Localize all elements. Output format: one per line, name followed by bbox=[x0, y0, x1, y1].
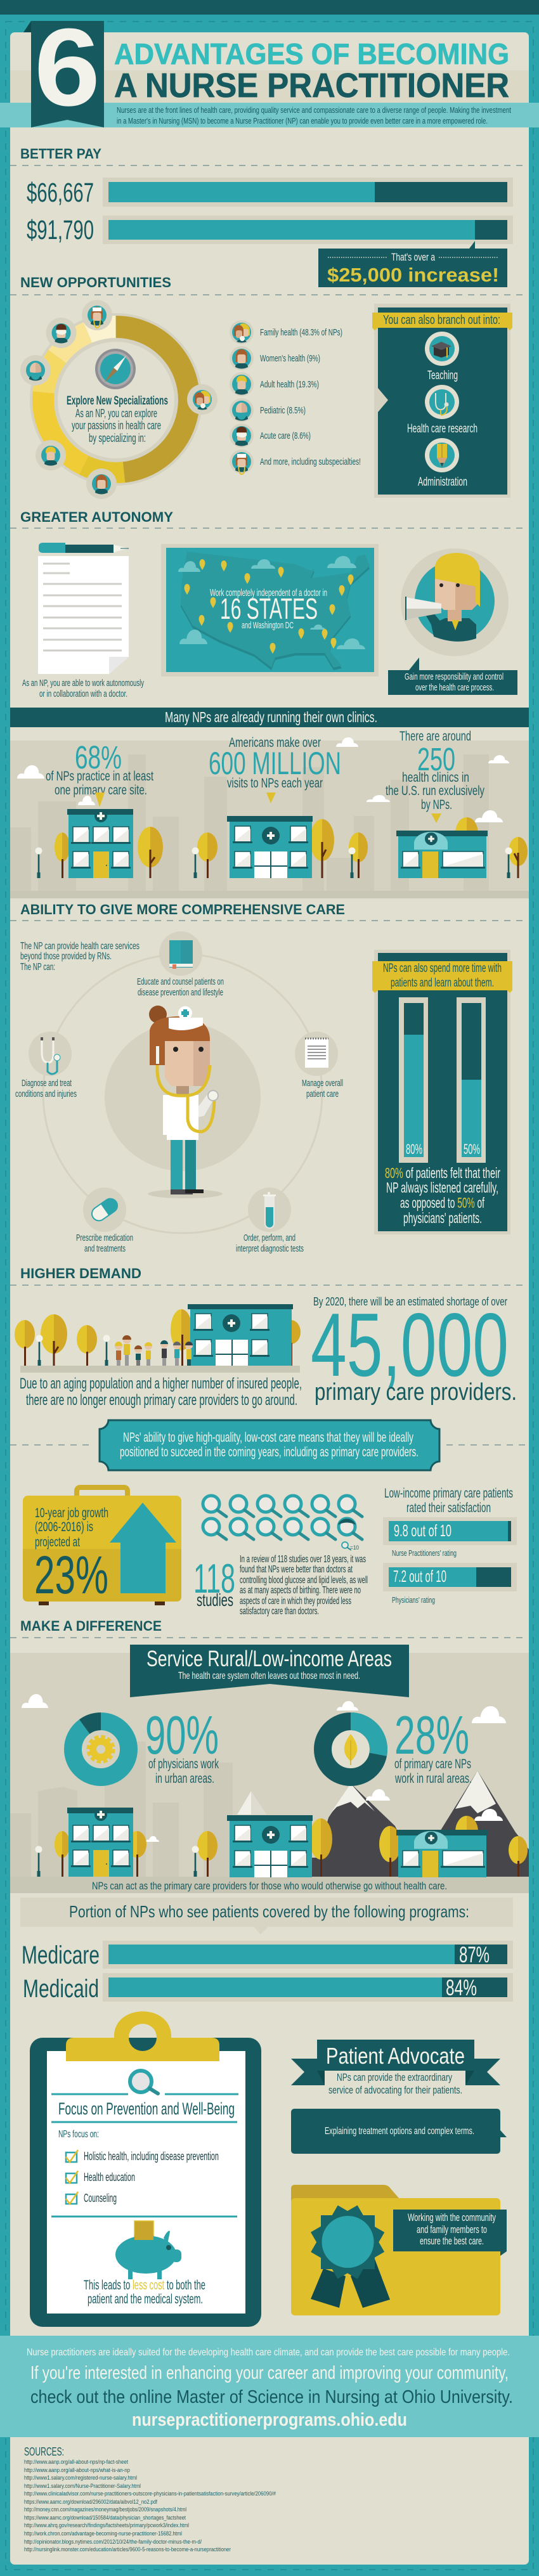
heading: higher demand: HIGHER DEMAND bbox=[20, 1265, 141, 1281]
text: aging population bbox=[20, 1375, 302, 1409]
text: listening stat: as opposed to 50% of bbox=[400, 1194, 484, 1211]
sources bbox=[24, 2445, 276, 2553]
building: rural clinic bbox=[396, 1830, 488, 1877]
text: review of studies: aspects of care in which they provided less bbox=[240, 1596, 351, 1607]
callout: responsibility bbox=[388, 657, 517, 695]
donut center text: As an NP, you can explore bbox=[75, 407, 157, 420]
text: review of studies: controlling blood glucose and lipid levels, as well bbox=[240, 1575, 368, 1586]
panel: rural service scene bbox=[10, 1645, 529, 1893]
legend: specialization list: Acute care (8.6%) bbox=[260, 430, 311, 441]
icon: graduation cap bbox=[425, 332, 459, 366]
banner: service areas: The health care system often leaves out those most in need. bbox=[178, 1671, 360, 1681]
label: manage bbox=[302, 1078, 343, 1099]
stat: 90 percent: 90% bbox=[145, 1705, 219, 1766]
text: autonomy caption: As an NP, you are able to work autonomously bbox=[22, 678, 144, 689]
sources: http://www.aanp.org/all-about-nps/np-fact-sheet bbox=[24, 2459, 128, 2465]
text: the np can: The NP can provide health care services bbox=[20, 941, 140, 952]
briefcase: job growth: (2006-2016) is bbox=[35, 1520, 93, 1534]
callout: increase bbox=[318, 241, 507, 287]
panel: branch out: Administration bbox=[418, 476, 467, 489]
folder: community: Working with the community bbox=[408, 2211, 496, 2223]
text: review of studies: found that NPs were better than doctors at bbox=[240, 1564, 353, 1575]
donut center text bbox=[67, 394, 168, 444]
legend: specialization list: And more, including subspecialties! bbox=[260, 456, 361, 467]
stat: 250 clinics: health clinics in bbox=[402, 770, 469, 785]
text: review of studies: as at many aspects of birthing. There were no bbox=[240, 1585, 361, 1596]
heading: comprehensive care: ABILITY TO GIVE MORE COMPREHENSIVE CARE bbox=[20, 902, 345, 917]
pictogram: studies: =10 bbox=[350, 1544, 359, 1551]
panel: us map: Work completely independent of a doctor in bbox=[210, 588, 327, 599]
text: aging population: there are no longer enough primary care providers to go around. bbox=[26, 1392, 297, 1409]
panel: us map bbox=[161, 544, 379, 676]
donut center text: by specializing in: bbox=[89, 432, 146, 444]
heading: make a difference: MAKE A DIFFERENCE bbox=[20, 1618, 162, 1634]
sources: SOURCES: bbox=[24, 2445, 64, 2458]
trees and lamps bbox=[36, 1816, 528, 1877]
sources: http://www.clinicaladvisor.com/nurse-practitioners-outscore-physicians-in-patientsatisfaction-survey/article/206090/# bbox=[24, 2490, 276, 2497]
bar chart: salaries: $91,790 bbox=[27, 215, 94, 245]
label: educate bbox=[137, 976, 224, 998]
stat: 250 clinics: by NPs. bbox=[421, 798, 452, 812]
text: the np can: beyond those provided by RNs. bbox=[20, 951, 112, 962]
illustration: nurse bbox=[148, 1006, 223, 1198]
clipboard: prevention: This leads to less cost to both the bbox=[84, 2278, 205, 2293]
donut chart: specializations bbox=[20, 300, 218, 499]
heading: better pay: BETTER PAY bbox=[20, 146, 101, 162]
callout: explaining bbox=[291, 2109, 507, 2154]
trees and lamps bbox=[36, 817, 528, 878]
title bbox=[114, 37, 509, 105]
stat: 28 percent: 28% bbox=[394, 1705, 469, 1766]
callout: increase: That's over a bbox=[391, 251, 435, 263]
bar chart: medicare and medicaid: 87% bbox=[459, 1943, 490, 1967]
label: diagnose: Diagnose and treat bbox=[22, 1078, 72, 1089]
icon: leaf bbox=[344, 1734, 357, 1765]
bar chart: medicare and medicaid: 84% bbox=[446, 1976, 477, 2000]
donut center text: Explore New Specializations bbox=[67, 394, 168, 408]
stat: 90 percent bbox=[145, 1705, 219, 1786]
icon: book bbox=[159, 931, 202, 976]
stat: 28 percent bbox=[394, 1705, 472, 1786]
people in line bbox=[115, 1335, 193, 1366]
chart: satisfaction ratings: 7.2 out of 10 bbox=[393, 1567, 446, 1586]
text: advocating bbox=[328, 2071, 462, 2096]
checklist: Holistic health, including disease prevention bbox=[84, 2150, 219, 2163]
sources: https://www.aamc.org/download/296002/data/aibvol12_no2.pdf bbox=[24, 2499, 157, 2505]
stat: 28 percent: work in rural areas. bbox=[394, 1771, 472, 1786]
header bbox=[0, 5, 539, 129]
icon: test tube bbox=[248, 1188, 291, 1232]
footer: call to action bbox=[0, 2336, 539, 2437]
mountains bbox=[237, 1771, 529, 1877]
banner: service areas bbox=[130, 1645, 409, 1697]
stat: 118 studies: studies bbox=[197, 1590, 233, 1610]
stat: 90 percent: of physicians work bbox=[148, 1757, 219, 1771]
building: clinic bbox=[188, 1304, 293, 1366]
text: advocating: NPs can provide the extraordinary bbox=[337, 2071, 452, 2083]
callout: responsibility: over the health care process. bbox=[415, 682, 494, 693]
label: order tests: Order, perform, and bbox=[244, 1233, 295, 1243]
bar chart: medicare and medicaid: Medicare bbox=[22, 1941, 100, 1969]
sources: http://www.aanp.org/all-about-nps/what-is-an-np bbox=[24, 2467, 130, 2473]
building: clinic three bbox=[396, 831, 488, 878]
checklist: Counseling bbox=[84, 2192, 117, 2204]
briefcase: job growth: 23% bbox=[34, 1545, 108, 1605]
stat: 118 studies bbox=[193, 1555, 235, 1610]
text: listening stat: physicians' patients. bbox=[403, 1210, 482, 1226]
stat: 250 clinics: the U.S. run exclusively bbox=[386, 784, 484, 798]
text: review of studies: satisfactory care than doctors. bbox=[240, 1606, 319, 1617]
illustration: person with megaphone bbox=[401, 548, 509, 656]
label: diagnose: conditions and injuries bbox=[15, 1089, 77, 1099]
briefcase: job growth bbox=[23, 1487, 181, 1605]
title: ADVANTAGES OF BECOMING bbox=[114, 37, 509, 70]
legend: specialization list: Family health (48.3% of NPs) bbox=[260, 327, 342, 338]
checklist bbox=[66, 2150, 219, 2204]
icon: pencil bbox=[425, 438, 459, 472]
icon: magnifier bbox=[130, 2071, 158, 2094]
text: the np can bbox=[20, 941, 140, 973]
clipboard: prevention bbox=[30, 2011, 261, 2327]
stat: 250 clinics: 250 bbox=[417, 741, 455, 777]
sources: http://www1.salary.com/registered-nurse-salary.html bbox=[24, 2475, 137, 2481]
bar chart: medicare and medicaid bbox=[22, 1941, 513, 2003]
label: order tests bbox=[236, 1233, 304, 1254]
callout: explaining: Explaining treatment options and complex terms. bbox=[325, 2126, 474, 2137]
briefcase: job growth: projected at bbox=[35, 1535, 80, 1550]
icon: stethoscope bbox=[425, 385, 459, 419]
label: prescribe: and treatments bbox=[84, 1243, 126, 1254]
icon: patient chart bbox=[295, 1032, 338, 1076]
icon: piggy bank bbox=[115, 2221, 181, 2279]
sources: http://work.chron.com/advantage-becoming-nurse-practitioner-15682.html bbox=[24, 2530, 182, 2537]
folder: community: and family members to bbox=[417, 2223, 487, 2236]
text: autonomy caption: or in collaboration with a doctor. bbox=[39, 689, 127, 699]
bar chart: medicare and medicaid: Medicaid bbox=[23, 1975, 99, 2003]
clipboard: prevention: Focus on Prevention and Well-Being bbox=[58, 2099, 235, 2118]
building: city clinic bbox=[67, 1808, 133, 1877]
panel: branch out bbox=[372, 304, 512, 498]
heading: new opportunities: NEW OPPORTUNITIES bbox=[20, 275, 171, 290]
icon: compass bbox=[95, 349, 136, 389]
legend: specialization list: Adult health (19.3%) bbox=[260, 379, 319, 390]
text: review of studies: In a review of 118 studies over 18 years, it was bbox=[240, 1554, 366, 1565]
chart: satisfaction ratings: Physicians' rating bbox=[392, 1595, 435, 1605]
sources: http://www.ahrq.gov/research/findings/factsheets/primary/pcwork3/index.html bbox=[24, 2522, 189, 2528]
panel: branch out: Health care research bbox=[407, 422, 477, 436]
bar chart: salaries: $66,667 bbox=[27, 178, 94, 208]
label: order tests: interpret diagnostic tests bbox=[236, 1243, 304, 1254]
plaque: well positioned bbox=[100, 1420, 439, 1470]
banner: service areas: Service Rural/Low-income Areas bbox=[146, 1647, 392, 1671]
icon: stethoscope bbox=[29, 1032, 72, 1076]
stat: 600 million: visits to NPs each year bbox=[227, 776, 323, 791]
stat: 118 studies: 118 bbox=[193, 1555, 235, 1602]
donut: rural nps bbox=[323, 1721, 379, 1777]
stat: 250 clinics: There are around bbox=[399, 729, 471, 744]
stat: 250 clinics bbox=[386, 729, 484, 823]
callout: portion of nps bbox=[20, 1898, 513, 1934]
text: listening stat bbox=[385, 1165, 500, 1226]
ribbon with number six: 6 bbox=[34, 5, 100, 129]
sources: http://www1.salary.com/Nurse-Practitioner-Salary.html bbox=[24, 2483, 141, 2489]
label: prescribe bbox=[76, 1233, 133, 1254]
building: clinic two bbox=[227, 816, 313, 878]
banner: clinics bbox=[10, 708, 529, 727]
label: educate: Educate and counsel patients on bbox=[137, 976, 224, 987]
panel: us map: 16 STATES bbox=[220, 592, 318, 625]
stat: 600 million bbox=[209, 735, 341, 803]
chart: listening bars: 50% bbox=[464, 1141, 480, 1157]
diagram: nurse capabilities bbox=[15, 931, 343, 1254]
title: A NURSE PRACTITIONER bbox=[114, 67, 509, 105]
building: town clinic bbox=[227, 1815, 313, 1877]
callout: increase: $25,000 increase! bbox=[327, 264, 499, 286]
label: prescribe: Prescribe medication bbox=[76, 1233, 133, 1243]
chart: satisfaction ratings bbox=[383, 1486, 517, 1605]
sources: http://money.cnn.com/magazines/moneymag/bestjobs/2009/snapshots/4.html bbox=[24, 2506, 186, 2513]
donut avatars bbox=[20, 300, 218, 499]
stat: 68 percent bbox=[46, 739, 153, 807]
chart: satisfaction ratings: 9.8 out of 10 bbox=[394, 1521, 451, 1540]
bar chart: salaries bbox=[27, 178, 513, 245]
icon: pen bbox=[39, 543, 129, 553]
chart: listening bars bbox=[399, 997, 486, 1163]
panel: time with patients bbox=[372, 950, 512, 1234]
briefcase: job growth: 10-year job growth bbox=[35, 1506, 108, 1520]
sources: http://opinionator.blogs.nytimes.com/2012/10/24/the-family-doctor-minus-the-m-d/ bbox=[24, 2539, 202, 2545]
clipboard: prevention: NPs focus on: bbox=[58, 2129, 99, 2140]
label: diagnose bbox=[15, 1078, 77, 1099]
intro text bbox=[117, 105, 511, 126]
text: advocating: service of advocating for their patients. bbox=[328, 2084, 462, 2096]
donut center text: your passions in health care bbox=[72, 419, 161, 432]
text: autonomy caption bbox=[22, 678, 144, 699]
chart: listening bars: 80% bbox=[406, 1141, 422, 1157]
chart: satisfaction ratings: Nurse Practitioners' rating bbox=[392, 1548, 457, 1558]
checklist: Health education bbox=[84, 2171, 135, 2184]
stat: 90 percent: in urban areas. bbox=[155, 1771, 214, 1786]
text: review of studies bbox=[240, 1554, 368, 1617]
heading: greater autonomy: GREATER AUTONOMY bbox=[20, 509, 173, 525]
donut: urban physicians bbox=[73, 1721, 129, 1777]
clip bbox=[66, 2011, 219, 2061]
building: clinic one bbox=[67, 809, 133, 878]
top dark bar bbox=[0, 0, 539, 15]
text: aging population: Due to an aging population and a higher number of insured people, bbox=[20, 1375, 302, 1392]
stat: 28 percent: of primary care NPs bbox=[394, 1757, 471, 1771]
icon: gear bbox=[88, 1737, 114, 1762]
text: the np can: The NP can: bbox=[20, 962, 55, 973]
legend: specialization list bbox=[230, 320, 361, 474]
chart: satisfaction ratings: rated their satisfaction bbox=[406, 1501, 491, 1515]
banner: clinics: Many NPs are already running their own clinics. bbox=[165, 709, 377, 725]
sources: https://www.aamc.org/download/150584/data/physician_shortages_factsheet bbox=[24, 2515, 186, 2521]
caption: primary care providers: NPs can act as the primary care providers for those who would otherwise go without health care. bbox=[92, 1880, 447, 1892]
label: manage: Manage overall bbox=[302, 1078, 343, 1089]
folder: community bbox=[291, 2185, 507, 2315]
ribbon: patient advocate bbox=[291, 2040, 500, 2085]
stat: 68 percent: one primary care site. bbox=[55, 783, 147, 798]
stat: 600 million: 600 MILLION bbox=[209, 746, 341, 781]
footer: call to action: nursepractitionerprograms.ohio.edu bbox=[132, 2410, 407, 2430]
pictogram: studies bbox=[203, 1496, 362, 1551]
illustration: queue at clinic bbox=[15, 1304, 301, 1373]
panel: branch out: Teaching bbox=[427, 369, 458, 382]
stat: 68 percent: 68% bbox=[75, 739, 122, 775]
stat: 600 million: Americans make over bbox=[229, 735, 321, 750]
icon: pill bbox=[83, 1188, 126, 1232]
panel: clinics scene bbox=[10, 729, 529, 898]
ribbon: patient advocate: Patient Advocate bbox=[326, 2043, 465, 2069]
legend: specialization list: Women's health (9%) bbox=[260, 353, 320, 364]
label: manage: patient care bbox=[306, 1089, 339, 1099]
legend: specialization list: Pediatric (8.5%) bbox=[260, 405, 306, 416]
label: educate: disease prevention and lifestyle bbox=[138, 987, 223, 998]
sources: http://nursinglink.monster.com/education/articles/9600-5-reasons-to-become-a-nursepractitioner bbox=[24, 2546, 231, 2553]
panel: us map: and Washington DC bbox=[242, 620, 294, 631]
folder: community: ensure the best care. bbox=[420, 2235, 484, 2247]
icon: award badge bbox=[311, 2205, 390, 2308]
icon: document bbox=[38, 556, 129, 674]
clipboard: prevention: patient and the medical system. bbox=[88, 2292, 203, 2307]
stat: 68 percent: of NPs practice in at least bbox=[46, 769, 153, 784]
